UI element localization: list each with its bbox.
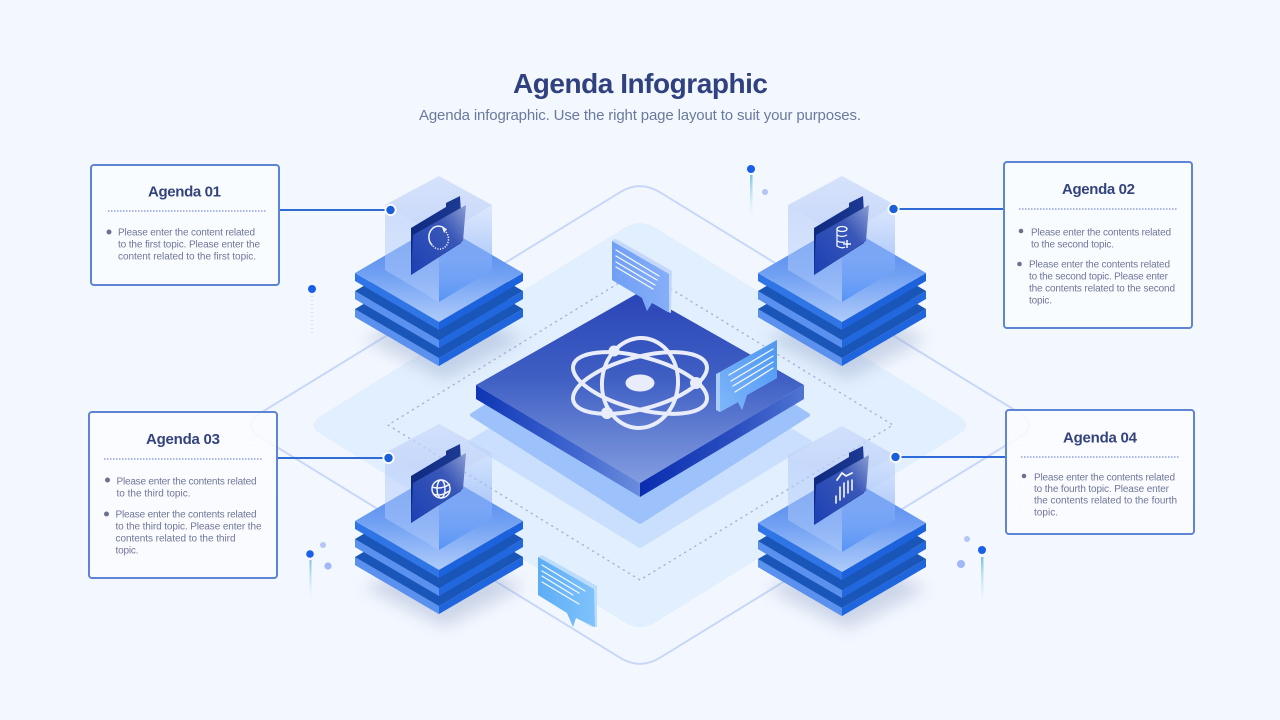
heading: agenda 01: Agenda 01 — [148, 184, 221, 200]
text: agenda 02 body: Please enter the contents related — [1031, 228, 1171, 238]
icon: atom — [567, 335, 713, 431]
text: agenda 04 body — [1022, 472, 1177, 518]
text: agenda 01 body: Please enter the content related — [118, 228, 255, 238]
decoration: top dot and stem — [747, 165, 768, 219]
text: agenda 01 body: content related to the first topic. — [118, 252, 256, 262]
central platform — [476, 292, 804, 497]
connector 3 — [277, 452, 394, 464]
decoration: bottom left dots — [306, 542, 332, 602]
text: agenda 02 body: to the second topic. — [1031, 240, 1114, 250]
stack 4 — [758, 426, 927, 629]
outer diamond outline — [251, 186, 1029, 664]
icon: globe — [432, 480, 450, 498]
text: agenda 03 body: Please enter the contents related — [116, 476, 256, 488]
text: agenda 03 body: contents related to the third — [116, 534, 236, 544]
stack 1 — [355, 176, 524, 379]
text: agenda 03 body: to the third topic. — [116, 488, 190, 500]
text: agenda 02 body: to the second topic. Please enter — [1029, 272, 1169, 282]
stack 3 — [355, 424, 524, 627]
text: agenda 02 body: topic. — [1029, 296, 1052, 306]
text: agenda 03 body — [104, 476, 262, 556]
text: agenda 04 body: Please enter the contents related — [1034, 472, 1175, 484]
platform left side — [476, 385, 640, 497]
heading: agenda 03: Agenda 03 — [146, 431, 220, 448]
panel: agenda 02 — [1004, 162, 1192, 328]
panel: agenda 04 — [1006, 410, 1194, 534]
dotted inner diamond — [388, 270, 893, 580]
middle diamond — [314, 223, 966, 627]
connector 2 — [888, 203, 1004, 215]
connector 1 — [279, 204, 396, 216]
subtitle: Agenda infographic. Use the right page layout to suit your purposes. — [419, 107, 861, 124]
icon: refresh — [429, 226, 448, 249]
text: agenda 04 body: the contents related to the fourth — [1034, 496, 1177, 506]
text: agenda 02 body: the contents related to the second — [1029, 284, 1175, 294]
decoration: left dot and dotted stem — [308, 285, 316, 334]
text: agenda 01 body — [106, 228, 260, 262]
text: agenda 04 body: to the fourth topic. Please enter — [1034, 484, 1170, 495]
icon: bar chart — [836, 473, 852, 503]
panel: agenda 01 — [91, 165, 279, 285]
text: agenda 03 body: to the third topic. Please enter the — [116, 522, 262, 532]
icon: speech bubble bottom — [538, 555, 597, 627]
text: agenda 03 body: Please enter the contents related — [116, 510, 256, 520]
pale lower plate — [470, 340, 810, 546]
central plate shadow layer — [472, 308, 808, 522]
decoration: bottom right dots — [957, 536, 986, 605]
platform top face — [476, 292, 804, 483]
heading: agenda 02: Agenda 02 — [1062, 181, 1135, 198]
platform right side — [640, 385, 804, 497]
panel: agenda 03 — [89, 412, 277, 578]
stack 2 — [758, 176, 927, 379]
icon: speech bubble top — [612, 239, 672, 313]
heading: agenda 04: Agenda 04 — [1063, 430, 1138, 446]
text: agenda 02 body: Please enter the contents related — [1029, 260, 1170, 270]
icon: speech bubble right — [716, 340, 777, 412]
text: agenda 01 body: to the first topic. Please enter the — [118, 240, 260, 250]
title: Agenda Infographic — [513, 68, 768, 99]
connector 4 — [890, 451, 1006, 463]
text: agenda 03 body: topic. — [116, 546, 138, 556]
icon: database plus — [837, 226, 851, 248]
text: agenda 04 body: topic. — [1034, 508, 1058, 518]
text: agenda 02 body — [1017, 228, 1175, 306]
